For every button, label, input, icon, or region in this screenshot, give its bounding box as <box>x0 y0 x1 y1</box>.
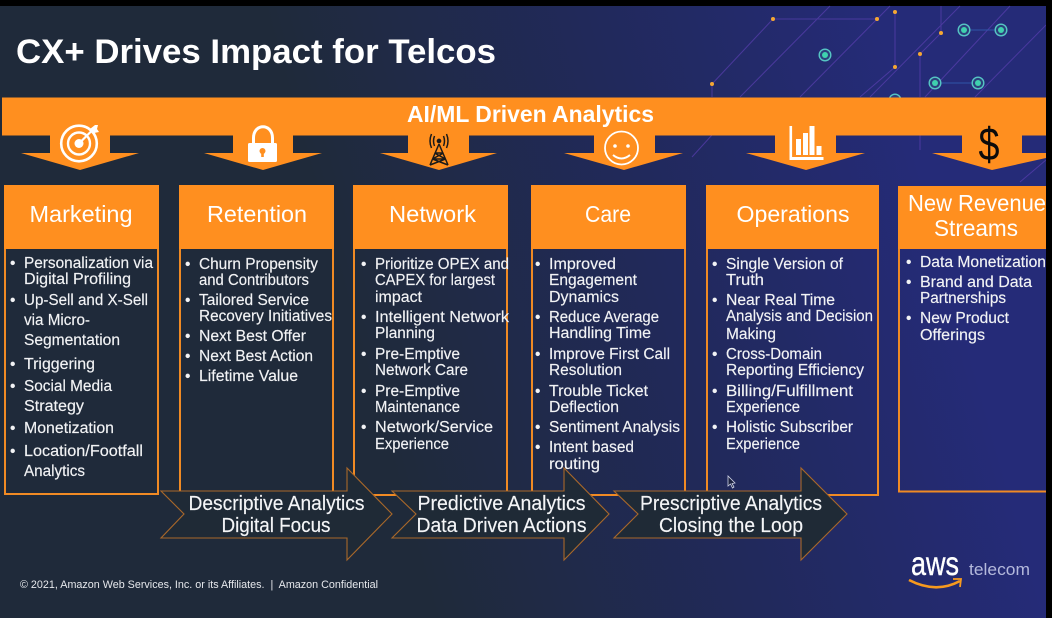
list: retention: • <box>185 328 190 345</box>
list: new revenue streams: New Product <box>920 310 1010 327</box>
logo: aws telecom: aws <box>911 545 959 582</box>
list: retention: Tailored Service <box>199 292 309 309</box>
list: network: • <box>361 256 366 273</box>
list: marketing <box>10 255 153 480</box>
panel: marketing <box>4 185 159 494</box>
heading: new revenue streams <box>908 190 1046 241</box>
list: care: Trouble Ticket <box>549 383 649 400</box>
panel: network <box>353 185 509 495</box>
list: network: impact <box>375 289 423 306</box>
list: marketing: Social Media <box>24 378 112 395</box>
heading: marketing: Marketing <box>30 201 132 227</box>
list: network: Network/Service <box>375 419 493 436</box>
icon: bar chart <box>790 126 824 160</box>
arrow: descriptive analytics: Digital Focus <box>222 515 330 537</box>
arrow: prescriptive analytics <box>614 468 847 560</box>
banner: AI/ML driven analytics <box>2 98 1046 170</box>
list: operations: Experience <box>726 399 800 416</box>
list: marketing: Triggering <box>24 356 95 373</box>
list: care: • <box>535 256 540 273</box>
list: care: Improved <box>549 256 616 273</box>
panel: care <box>531 185 686 495</box>
list: care: • <box>535 383 540 400</box>
icon: dollar: $ <box>978 118 1000 170</box>
list: marketing: • <box>10 443 15 460</box>
list: operations: • <box>712 383 717 400</box>
list: marketing: Location/Footfall <box>24 443 143 460</box>
panel: operations <box>706 185 879 495</box>
list: network: Network Care <box>375 362 468 379</box>
list: care: Resolution <box>549 362 622 379</box>
heading: new revenue streams: New Revenue <box>908 190 1046 216</box>
list: new revenue streams: Brand and Data <box>920 274 1032 291</box>
banner label: AI/ML Driven Analytics <box>407 101 654 127</box>
list: marketing: Monetization <box>24 420 114 437</box>
list: retention: • <box>185 368 190 385</box>
list: new revenue streams <box>906 254 1046 344</box>
list: operations: • <box>712 292 717 309</box>
list: retention: Churn Propensity <box>199 256 318 273</box>
heading: network: Network <box>389 201 476 227</box>
list: care: Handling Time <box>549 325 651 342</box>
list: retention: • <box>185 256 190 273</box>
icon: mouse cursor <box>728 476 735 488</box>
list: network: Pre-Emptive <box>375 346 460 363</box>
list: care: • <box>535 346 540 363</box>
list: network <box>361 256 509 453</box>
arrow: retention <box>204 135 322 170</box>
list: network: • <box>361 419 366 436</box>
list: new revenue streams: Partnerships <box>920 290 1006 307</box>
list: new revenue streams: • <box>906 274 911 291</box>
list: marketing: Up-Sell and X-Sell <box>24 292 148 309</box>
heading: new revenue streams: Streams <box>934 215 1018 241</box>
list: network: Planning <box>375 325 435 342</box>
black strip at right edge <box>1046 0 1052 618</box>
list: care: Reduce Average <box>549 309 659 326</box>
arrow: descriptive analytics: Descriptive Analytics <box>188 493 364 515</box>
panel: retention <box>179 185 334 494</box>
list: marketing: • <box>10 378 15 395</box>
circuit decoration <box>692 6 1046 182</box>
arrow: new revenue <box>932 135 1046 170</box>
list: care: Improve First Call <box>549 346 670 363</box>
list: network: CAPEX for largest <box>375 272 496 289</box>
list: care: • <box>535 439 540 456</box>
list: operations: • <box>712 256 717 273</box>
heading: operations: Operations <box>736 201 850 227</box>
list: network: • <box>361 346 366 363</box>
arrow: operations <box>746 135 865 170</box>
arrow: predictive analytics: Predictive Analytics <box>418 493 586 515</box>
arrow: prescriptive analytics: Closing the Loop <box>659 515 803 537</box>
list: care <box>535 256 680 473</box>
arrow: predictive analytics: Data Driven Actions <box>416 515 586 537</box>
list: marketing: Strategy <box>24 398 84 415</box>
list: retention: Recovery Initiatives <box>199 308 332 325</box>
list: retention: Next Best Action <box>199 348 313 365</box>
list: operations: Analysis and Decision <box>726 308 873 325</box>
list: care: Sentiment Analysis <box>549 419 680 436</box>
heading: care: Care <box>585 201 631 227</box>
list: network: • <box>361 383 366 400</box>
list: new revenue streams: Data Monetization <box>920 254 1046 271</box>
list: marketing: Personalization via <box>24 255 153 272</box>
list: operations: Near Real Time <box>726 292 835 309</box>
list: network: Prioritize OPEX and <box>375 256 509 273</box>
list: network: Intelligent Network <box>375 309 509 326</box>
list: care: Dynamics <box>549 289 619 306</box>
list: operations: Single Version of <box>726 256 844 273</box>
list: marketing: via Micro- <box>24 312 90 329</box>
arrow: network <box>380 135 497 170</box>
list: new revenue streams: Offerings <box>920 327 985 344</box>
logo: aws telecom: telecom <box>969 560 1030 579</box>
list: care: • <box>535 309 540 326</box>
list: marketing: Digital Profiling <box>24 271 131 288</box>
icon: lock <box>248 127 277 162</box>
list: marketing: Segmentation <box>24 332 120 349</box>
arrow: descriptive analytics <box>161 468 392 560</box>
icon: cell tower <box>430 134 448 165</box>
panel: new revenue streams <box>898 186 1048 492</box>
arrow: care <box>564 135 683 170</box>
arrow: predictive analytics <box>392 468 609 560</box>
list: operations: Making <box>726 326 776 343</box>
list: network: Maintenance <box>375 399 460 416</box>
list: retention: • <box>185 348 190 365</box>
list: marketing: • <box>10 420 15 437</box>
list: operations: Billing/Fulfillment <box>726 383 854 400</box>
icon: smiley <box>605 132 638 164</box>
list: operations: Reporting Efficiency <box>726 362 864 379</box>
list: network: Pre-Emptive <box>375 383 460 400</box>
list: care: • <box>535 419 540 436</box>
list: operations: Experience <box>726 436 800 453</box>
list: new revenue streams: • <box>906 254 911 271</box>
list: new revenue streams: • <box>906 310 911 327</box>
list: retention <box>185 256 332 385</box>
list: care: Deflection <box>549 399 619 416</box>
list: operations: • <box>712 346 717 363</box>
list: operations: Holistic Subscriber <box>726 419 853 436</box>
list: care: Intent based <box>549 439 634 456</box>
list: marketing: • <box>10 292 15 309</box>
list: operations: Truth <box>726 272 764 289</box>
list: network: • <box>361 309 366 326</box>
list: retention: • <box>185 292 190 309</box>
heading: retention: Retention <box>207 201 307 227</box>
list: marketing: • <box>10 356 15 373</box>
arrow: prescriptive analytics: Prescriptive Analytics <box>640 493 822 515</box>
list: network: Experience <box>375 436 449 453</box>
list: marketing: Analytics <box>24 463 85 480</box>
icon: target <box>61 125 99 161</box>
logo: aws telecom <box>909 545 1030 587</box>
list: care: routing <box>549 456 600 473</box>
title: CX+ Drives Impact for Telcos <box>16 33 496 71</box>
list: retention: and Contributors <box>199 272 309 289</box>
arrow: marketing <box>21 135 139 170</box>
list: operations: Cross-Domain <box>726 346 822 363</box>
list: marketing: • <box>10 255 15 272</box>
list: operations: • <box>712 419 717 436</box>
list: operations <box>712 256 873 453</box>
list: retention: Lifetime Value <box>199 368 298 385</box>
footer copyright: © 2021, Amazon Web Services, Inc. or its Affiliates. | Amazon Confidential <box>20 579 378 591</box>
list: retention: Next Best Offer <box>199 328 306 345</box>
list: care: Engagement <box>549 272 638 289</box>
